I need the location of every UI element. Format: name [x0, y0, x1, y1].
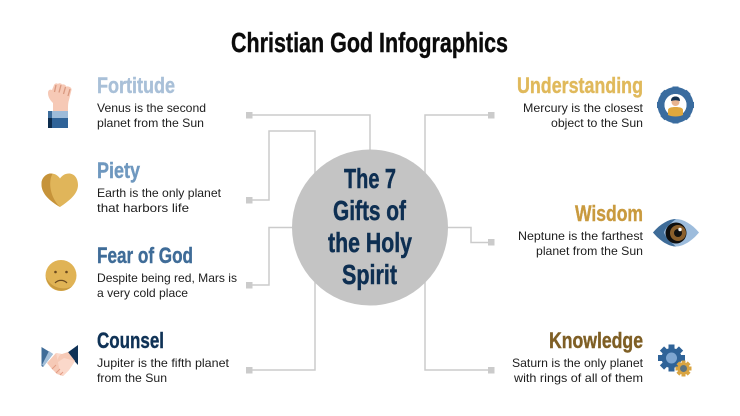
connector: Counsel	[246, 280, 315, 374]
icon: sad face	[46, 260, 76, 291]
text: Counsel: from the Sun	[97, 371, 167, 385]
icon: gears	[658, 344, 692, 376]
text: Counsel	[97, 328, 230, 385]
center circle: The 7 Gifts of the Holy Spirit: The 7	[344, 163, 396, 194]
text: Piety: that harbors life	[97, 201, 189, 215]
text: Fear of God: Despite being red, Mars is	[97, 271, 237, 285]
text: Wisdom	[518, 201, 644, 258]
text: Knowledge: with rings of all of them	[513, 371, 643, 385]
text: Fortitude: Venus is the second	[97, 101, 206, 115]
text: Knowledge	[512, 328, 644, 385]
text: Piety: Piety	[97, 158, 141, 183]
icon: heart	[42, 174, 78, 207]
connector: Wisdom	[446, 228, 494, 246]
text: Fortitude: planet from the Sun	[97, 116, 204, 130]
text: Wisdom: planet from the Sun	[536, 244, 643, 258]
center circle: The 7 Gifts of the Holy Spirit	[292, 150, 448, 306]
text: Understanding: Mercury is the closest	[523, 101, 644, 115]
connector: Knowledge	[425, 280, 494, 374]
center circle: The 7 Gifts of the Holy Spirit: Gifts of	[333, 195, 406, 226]
text: Understanding: object to the Sun	[551, 116, 643, 130]
icon: handshake	[42, 345, 78, 376]
text: Counsel: Jupiter is the fifth planet	[97, 356, 230, 370]
icon: gear with person	[657, 86, 694, 124]
center circle: The 7 Gifts of the Holy Spirit: the Holy	[328, 227, 412, 258]
text: Counsel: Counsel	[97, 328, 164, 353]
text: Piety: Earth is the only planet	[97, 186, 222, 200]
connector: Understanding	[425, 112, 494, 175]
text: Knowledge: Saturn is the only planet	[512, 356, 644, 370]
text: Understanding: Understanding	[517, 73, 643, 98]
text: Wisdom: Wisdom	[575, 201, 643, 226]
text: Fear of God	[97, 243, 237, 300]
connector: Piety	[246, 131, 315, 204]
center circle: The 7 Gifts of the Holy Spirit: Spirit	[342, 259, 397, 290]
icon: raised fist	[48, 83, 72, 128]
connector: Fear of God	[246, 228, 294, 288]
icon: eye	[653, 219, 699, 246]
text: Wisdom: Neptune is the farthest	[518, 229, 644, 243]
text: Knowledge: Knowledge	[549, 328, 643, 353]
text: Fortitude: Fortitude	[97, 73, 175, 98]
connector: Fortitude	[246, 112, 370, 152]
text: Fortitude	[97, 73, 206, 130]
text: Understanding	[517, 73, 644, 130]
text: Piety	[97, 158, 222, 215]
text: Fear of God: a very cold place	[97, 286, 188, 300]
text: Fear of God: Fear of God	[97, 243, 193, 268]
title: Christian God Infographics	[231, 27, 508, 58]
